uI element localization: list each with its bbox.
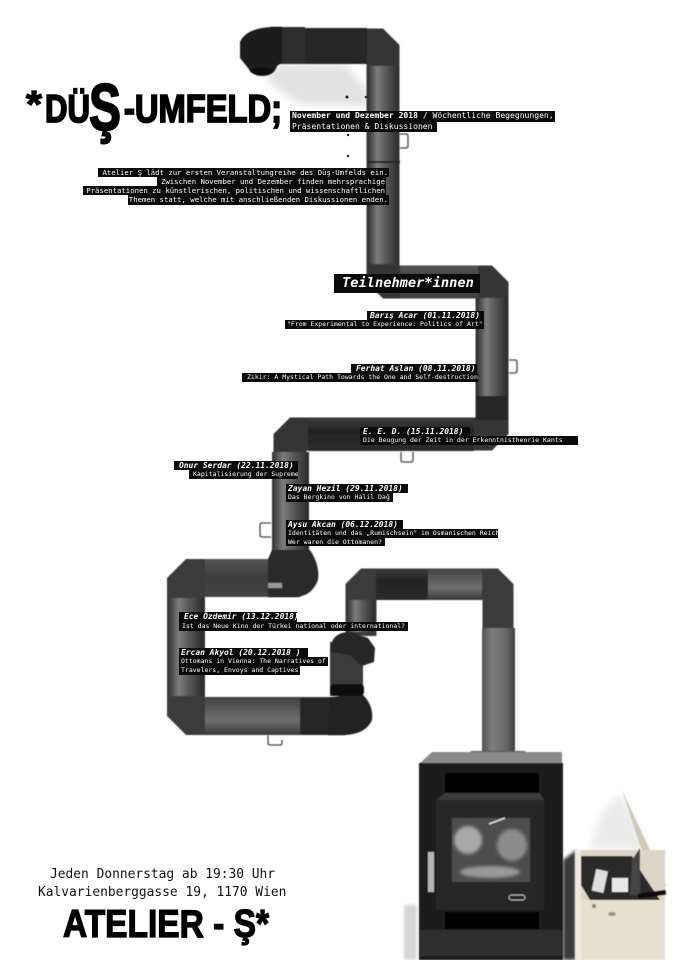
entry: Ferhat Aslan: Ferhat Aslan (08.11.2018) (356, 364, 475, 373)
title: -UMFELD; (124, 88, 282, 131)
entry: Barış Acar: "From Experimental to Experience: Politics of Art" (287, 320, 483, 328)
entry: Ece Özdemir: Ist das Neue Kino der Türkei national oder international? (182, 622, 405, 630)
pipe: left loop (168, 559, 345, 735)
subtitle: November und Dezember 2018 / Wöchentliche Begegnungen, (292, 111, 554, 120)
entry: Ercan Akyol: Travelers, Envoys and Captives (181, 666, 298, 674)
wall rivets (346, 96, 367, 157)
pipe bracket handles (260, 134, 517, 745)
entry: Aysu Akcan: Wer waren die Ottomanen? (288, 538, 382, 546)
footer: ATELIER - Ş*: ATELIER - Ş* (63, 903, 270, 946)
intro paragraph: Atelier Ş lädt zur ersten Veranstaltungreihe des Düş-Umfelds ein. (102, 168, 388, 176)
footer: time and address: Jeden Donnerstag ab 19:30 Uhr (50, 867, 275, 882)
subtitle: Präsentationen & Diskussionen (292, 122, 432, 130)
pipe: dark elbow and riser at lower right (328, 632, 375, 735)
wall shading behind stove (563, 850, 576, 960)
wall shadow under top elbow (268, 64, 368, 106)
stove (419, 751, 563, 960)
wood box with scraps (575, 790, 666, 960)
entry: Ece Özdemir: Ece Özdemir (13.12.2018) (184, 612, 297, 621)
intro paragraph: Themen statt, welche mit anschließenden Diskussionen enden. (129, 195, 388, 204)
entry: Barış Acar: Barış Acar (01.11.2018) (370, 311, 480, 320)
intro paragraph: Präsentationen zu künstlerischen, politischen und wissenschaftlichen (86, 186, 385, 195)
entry: Zayan Hezil: Zayan Hezil (29.11.2018) (288, 484, 403, 493)
floor shade (404, 905, 417, 960)
title: Ş (89, 70, 121, 144)
title: DÜ (45, 88, 90, 131)
entry: Ercan Akyol: Ercan Akyol (20.12.2018 ) (181, 648, 300, 657)
entry: E. E. D.: E. E. D. (15.11.2018) (363, 427, 463, 436)
entry: Onur Serdar: Onur Serdar (22.11.2018) (179, 461, 294, 470)
stove window (452, 818, 530, 882)
pipe: upper run from top elbow to lower left elbow (260, 27, 517, 745)
pipe: top elbow (240, 27, 282, 76)
title: * (26, 84, 42, 126)
heading: Teilnehmer*innen: Teilnehmer*innen (342, 275, 474, 291)
entry: Onur Serdar: Kapitalisierung der Supreme (193, 470, 298, 478)
entry: Ferhat Aslan: Zikir: A Mystical Path Towards the One and Self-destruction (247, 373, 478, 381)
intro paragraph: Zwischen November und Dezember finden mehrsprachige (161, 177, 385, 186)
footer: time and address: Kalvarienberggasse 19, 1170 Wien (38, 885, 286, 900)
entry: Aysu Akcan: Aysu Akcan (06.12.2018) (288, 520, 398, 529)
pipe: upper right run down to stove (347, 569, 515, 756)
entry: Aysu Akcan: Identitäten und das „Rumischsein" im Osmanischen Reich (288, 529, 498, 537)
entry: Ercan Akyol: Ottomans in Vienna: The Narratives of (181, 657, 326, 665)
pipe: dark elbow at middle (268, 550, 318, 597)
entry: Zayan Hezil: Das Bergkino von Halil Dağ (288, 493, 390, 501)
entry: E. E. D.: Die Beugung der Zeit in der Erkenntnistheorie Kants (363, 436, 563, 444)
